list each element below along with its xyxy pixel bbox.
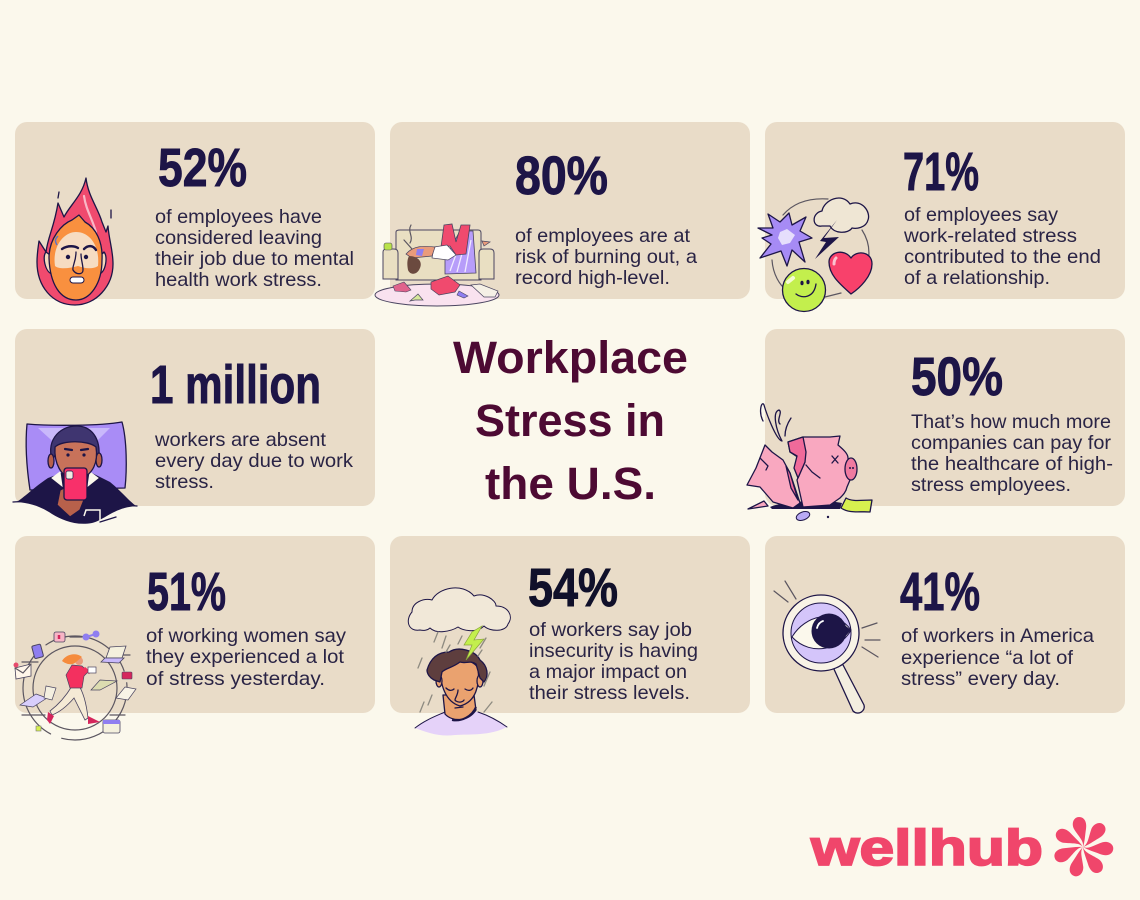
title: Workplace <box>453 332 688 383</box>
icon: person lying on sofa <box>375 224 499 306</box>
text: 51% description: they experienced a lot <box>146 647 345 668</box>
text: 52% description: health work stress. <box>155 270 322 291</box>
text: 50% description: That’s how much more <box>911 412 1111 433</box>
text: 51% description: of working women say <box>146 626 346 647</box>
text: 54% description: insecurity is having <box>529 641 698 662</box>
text: 54% description <box>529 620 698 704</box>
icon: wellhub swirl <box>1053 817 1115 878</box>
stat: 50%: 50% <box>911 347 1003 407</box>
panel: 1 million absent <box>12 329 375 530</box>
text: 80% description: record high-level. <box>515 268 670 289</box>
text: 50% description: stress employees. <box>911 475 1071 496</box>
text: 51% description: of stress yesterday. <box>146 669 325 690</box>
text: 1 million description: every day due to work <box>155 451 353 472</box>
stat: 41%: 41% <box>900 562 980 622</box>
text: 41% description <box>901 626 1094 690</box>
title: the U.S. <box>485 458 656 509</box>
logo: wellhub <box>810 817 1115 878</box>
text: 41% description: of workers in America <box>901 626 1094 647</box>
text: 71% description: contributed to the end <box>904 247 1101 268</box>
text: 51% description <box>146 626 346 690</box>
icon: woman running through tasks <box>14 630 136 740</box>
text: 41% description: stress” every day. <box>901 669 1060 690</box>
text: 52% description: considered leaving <box>155 228 322 249</box>
text: 54% description: of workers say job <box>529 620 692 641</box>
stat: 52%: 52% <box>158 138 247 198</box>
icon: magnifying glass with eye <box>774 581 880 713</box>
text: 80% description: of employees are at <box>515 226 691 247</box>
icon: emotions circle <box>758 198 872 312</box>
panel: 52% considered leaving <box>15 122 375 305</box>
icon: broken piggy bank <box>747 404 872 522</box>
stat: 80%: 80% <box>515 146 608 206</box>
stat: 71%: 71% <box>903 142 979 202</box>
text: 50% description: companies can pay for <box>911 433 1112 454</box>
text: 50% description <box>911 412 1113 496</box>
panel: 80% burnout <box>375 122 750 306</box>
text: 54% description: a major impact on <box>529 662 687 683</box>
text: 71% description: of employees say <box>904 205 1058 226</box>
icon: flaming head <box>37 178 113 305</box>
text: 80% description: risk of burning out, a <box>515 247 697 268</box>
text: 71% description: of a relationship. <box>904 268 1050 289</box>
icon: person in bed with phone <box>12 422 150 530</box>
text: 1 million description: stress. <box>155 472 214 493</box>
stat: 51%: 51% <box>147 562 226 622</box>
text: 52% description <box>155 207 354 291</box>
text: 52% description: of employees have <box>155 207 322 228</box>
text: 41% description: experience “a lot of <box>901 648 1074 669</box>
stat: 1 million: 1 million <box>150 355 321 415</box>
panel: 54% job insecurity <box>390 536 750 736</box>
text: 1 million description: workers are absent <box>154 430 327 451</box>
title <box>453 332 688 509</box>
text: 80% description <box>515 226 697 289</box>
title: Stress in <box>475 395 665 446</box>
logo: wellhub: wellhub <box>810 820 1043 876</box>
icon: man under storm cloud <box>408 588 510 736</box>
text: 71% description: work-related stress <box>903 226 1077 247</box>
text: 71% description <box>903 205 1101 289</box>
stat: 54%: 54% <box>528 558 618 618</box>
panel: 50% healthcare cost <box>747 329 1125 522</box>
panel: 41% daily stress <box>765 536 1125 713</box>
text: 54% description: their stress levels. <box>529 683 690 704</box>
text: 50% description: the healthcare of high- <box>911 454 1113 475</box>
panel: 71% relationship <box>758 122 1125 312</box>
text: 52% description: their job due to mental <box>155 249 354 270</box>
text: 1 million description <box>154 430 353 493</box>
panel: 51% working women <box>14 536 375 740</box>
